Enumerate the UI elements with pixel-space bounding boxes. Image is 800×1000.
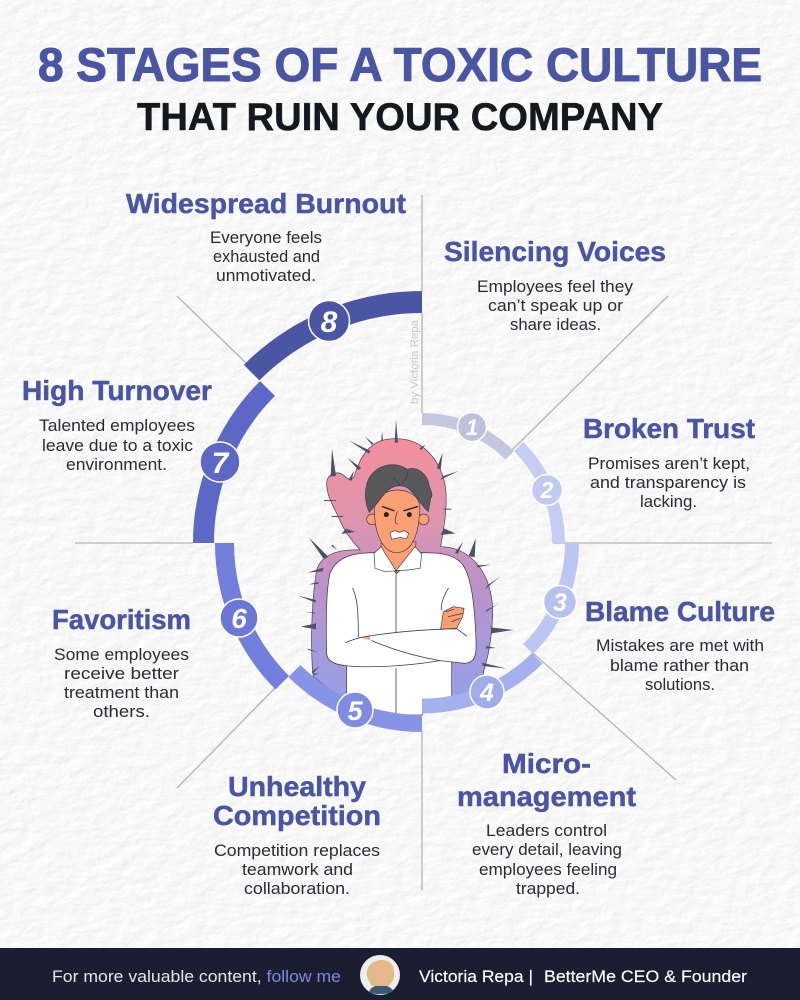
footer author — [419, 967, 747, 986]
badge 1 — [458, 412, 486, 442]
badge 8: 8 — [321, 306, 338, 339]
stage 3: blame culture: blame rather than — [610, 656, 749, 675]
title: 8 STAGES OF A TOXIC CULTURE — [38, 38, 762, 91]
title: THAT RUIN YOUR COMPANY — [137, 96, 663, 139]
stage 7: high turnover: Talented employees — [39, 416, 195, 435]
stage 3: blame culture: Blame Culture — [585, 596, 775, 627]
stage 2: broken trust: Promises aren’t kept, — [588, 454, 750, 473]
shirt lines and crossed arms — [345, 571, 467, 715]
stage 2: broken trust: and transparency is — [590, 473, 746, 492]
stage 3: blame culture: Mistakes are met with — [596, 636, 764, 655]
hair — [365, 465, 432, 512]
stage 8: widespread burnout: unmotivated. — [216, 266, 316, 285]
stage 6: favoritism: others. — [93, 702, 150, 721]
face — [375, 490, 419, 553]
badge 4: 4 — [479, 679, 494, 707]
stage 6: favoritism — [52, 604, 191, 721]
stage 1: silencing voices: Employees feel they — [477, 277, 634, 296]
stage 5: unhealthy competition: Unhealthy — [228, 771, 367, 802]
watermark: by Victoria Repa — [409, 319, 421, 404]
stage 2: broken trust: Broken Trust — [583, 413, 755, 444]
stage 4: micromanagement: management — [457, 781, 636, 812]
badge 2 — [532, 474, 562, 506]
badge 6: 6 — [231, 603, 247, 634]
segment 2 — [518, 446, 558, 543]
stage 6: favoritism: receive better — [64, 664, 179, 683]
stage 4: micromanagement: Leaders control — [486, 821, 607, 840]
stage 5: unhealthy competition: teamwork and — [242, 860, 353, 879]
stage 1: silencing voices: can’t speak up or — [488, 296, 623, 315]
spikes — [298, 419, 513, 675]
stage 1: silencing voices: share ideas. — [510, 315, 601, 334]
segment 4 — [422, 658, 537, 706]
stage 8: widespread burnout: Everyone feels — [210, 228, 322, 247]
avatar — [360, 955, 400, 995]
collar — [374, 547, 422, 572]
stage 5: unhealthy competition: collaboration. — [244, 879, 350, 898]
badge 5 — [337, 692, 373, 728]
stage 4: micromanagement — [457, 748, 636, 898]
stage 3: blame culture: solutions. — [645, 675, 715, 694]
stage 5: unhealthy competition — [213, 771, 381, 898]
segment 7 — [204, 388, 268, 543]
stage 7: high turnover: environment. — [66, 455, 167, 474]
shirt torso — [347, 660, 452, 715]
badge 3 — [544, 586, 576, 618]
stage 3: blame culture — [585, 596, 775, 694]
neck — [381, 542, 416, 571]
stage 8: widespread burnout — [126, 188, 406, 285]
divider lines — [75, 195, 772, 890]
segment 5 — [294, 671, 422, 724]
ears — [367, 514, 377, 525]
stage 4: micromanagement: trapped. — [516, 879, 580, 898]
stage 6: favoritism: Some employees — [54, 645, 189, 664]
segment 6 — [224, 543, 282, 683]
stage 2: broken trust — [583, 413, 755, 511]
shirt upper body and arms — [326, 553, 476, 667]
stage 1: silencing voices: Silencing Voices — [444, 236, 666, 267]
stage 4: micromanagement: employees feeling — [479, 860, 617, 879]
footer call to action: For more valuable content, follow me — [52, 967, 341, 986]
stage 8: widespread burnout: exhausted and — [213, 247, 320, 266]
badge 1: 1 — [466, 415, 478, 440]
stage 4: micromanagement: Micro- — [502, 748, 591, 779]
footer author: Victoria Repa | — [419, 967, 533, 986]
footer author: BetterMe CEO & Founder — [544, 967, 747, 986]
badge 5: 5 — [347, 696, 363, 726]
character: angry man with spiky aura — [298, 419, 513, 715]
badge 3: 3 — [553, 589, 567, 617]
badge 6 — [220, 599, 258, 637]
facial features — [383, 472, 417, 539]
segment 8 — [252, 302, 422, 373]
stage 2: broken trust: lacking. — [640, 492, 697, 511]
badge 4 — [470, 675, 504, 709]
aura blob — [312, 439, 493, 708]
stage 5: unhealthy competition: Competition replaces — [214, 841, 380, 860]
stage 8: widespread burnout: Widespread Burnout — [126, 188, 406, 219]
stage 6: favoritism: Favoritism — [52, 604, 191, 635]
badge 8 — [308, 300, 350, 342]
stage 6: favoritism: treatment than — [64, 683, 179, 702]
stage 1: silencing voices — [444, 236, 666, 334]
badge 7: 7 — [212, 447, 230, 480]
segment 1 — [422, 419, 510, 455]
segment 3 — [528, 543, 572, 649]
stage 5: unhealthy competition: Competition — [213, 800, 381, 831]
spiral ring chart — [204, 302, 572, 724]
stage 7: high turnover: leave due to a toxic — [42, 436, 193, 455]
stage 4: micromanagement: every detail, leaving — [472, 840, 622, 859]
badge 7 — [200, 442, 240, 482]
footer bar — [0, 948, 800, 1000]
badge 2: 2 — [540, 477, 554, 503]
stage 7: high turnover: High Turnover — [22, 375, 212, 406]
title — [38, 38, 762, 139]
stage 7: high turnover — [22, 375, 212, 474]
